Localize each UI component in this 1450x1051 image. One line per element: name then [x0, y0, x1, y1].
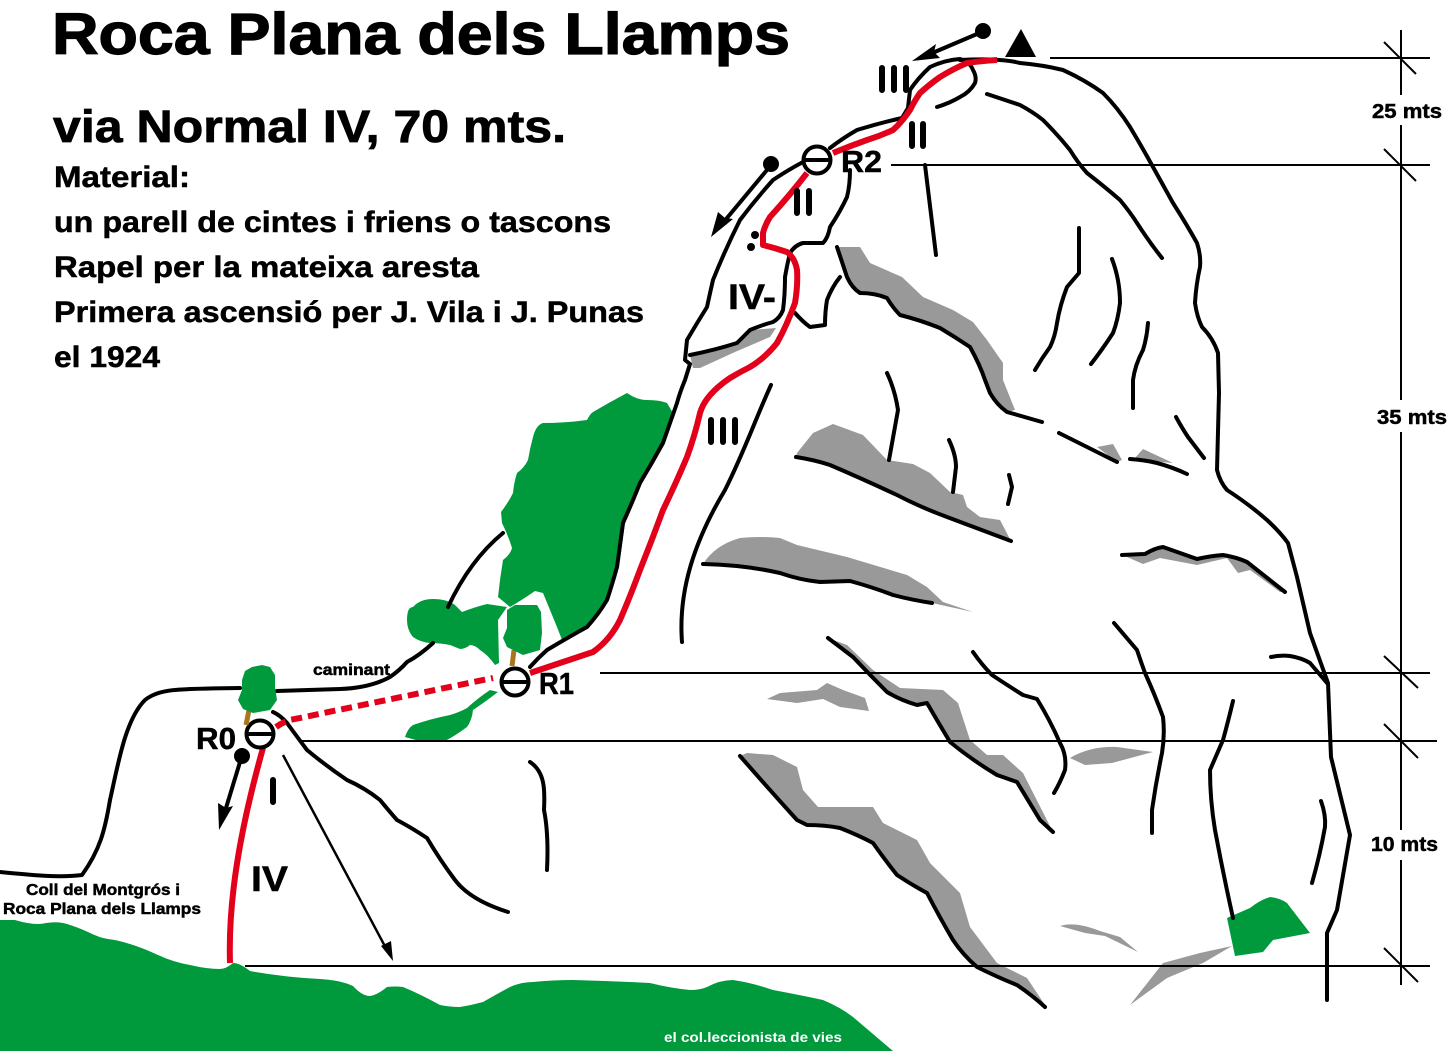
tree at R1 [503, 605, 542, 666]
icon: summit triangle [1005, 29, 1036, 57]
route grade and belay labels: IV [251, 860, 289, 899]
title: Roca Plana dels Llamps [52, 2, 790, 67]
dimension lines [245, 30, 1437, 985]
place labels: caminant [313, 662, 391, 679]
place labels [3, 662, 391, 918]
tree at R0 [238, 665, 277, 725]
gray rock shadows [690, 247, 1285, 1005]
route information text: el 1924 [54, 341, 160, 374]
height labels [1371, 101, 1447, 856]
route grade and belay labels: R2 [841, 144, 882, 179]
grade tick marks [273, 68, 923, 802]
route grade and belay labels [196, 144, 882, 899]
place labels: Roca Plana dels Llamps [3, 901, 201, 918]
belay station R0 [246, 720, 274, 748]
subtitle: via Normal IV, 70 mts. [53, 101, 566, 152]
route information text: Material: [54, 161, 190, 194]
route information text: un parell de cintes i friens o tascons [54, 206, 611, 239]
red climbing route [230, 60, 997, 963]
belay station R1 [502, 668, 528, 696]
route grade and belay labels: R1 [539, 666, 574, 701]
rappel arrows [218, 23, 991, 830]
height labels: 35 mts [1377, 407, 1447, 429]
route information text: Primera ascensió per J. Vila i J. Punas [54, 296, 644, 329]
route grade and belay labels: IV- [728, 278, 776, 317]
approach arrow [283, 755, 393, 961]
height labels: 25 mts [1372, 101, 1442, 123]
credit: el col.leccionista de vies [664, 1029, 842, 1045]
route grade and belay labels: R0 [196, 721, 236, 756]
belay station R2 [804, 146, 830, 174]
height labels: 10 mts [1371, 834, 1438, 856]
place labels: Coll del Montgrós i [26, 882, 180, 899]
icon: two bolts [747, 231, 759, 251]
route information text: Rapel per la mateixa aresta [54, 251, 479, 284]
route information text [54, 161, 644, 374]
green vegetation [0, 393, 1310, 1051]
